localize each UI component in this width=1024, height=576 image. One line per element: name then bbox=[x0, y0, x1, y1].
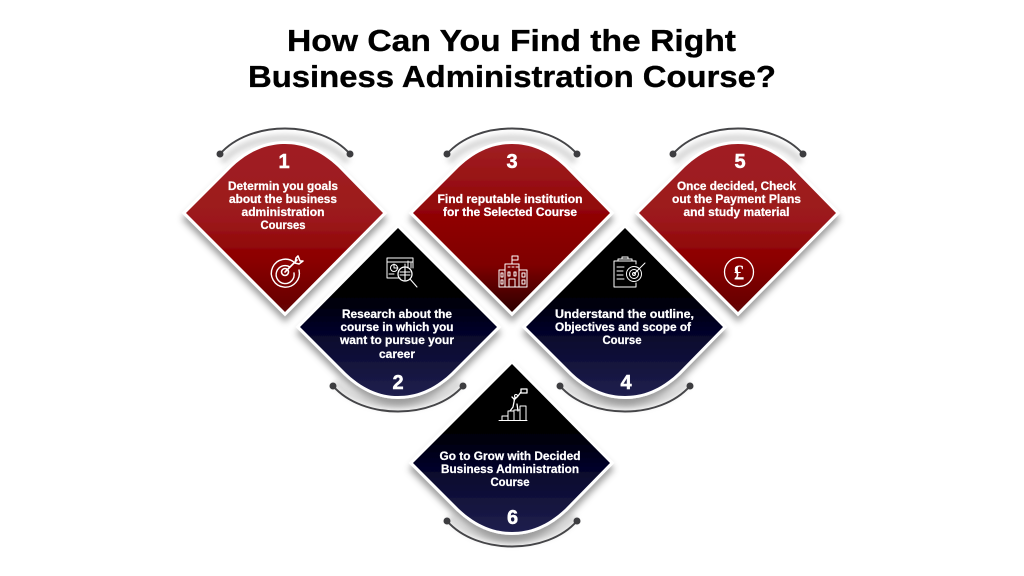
panel: step 2: 2 bbox=[392, 372, 404, 394]
panel: step 4: 4 bbox=[620, 372, 632, 394]
panel: step 1: 1 bbox=[278, 151, 290, 173]
icon: target with arrow bbox=[271, 256, 303, 287]
panel: step 2: Research about the bbox=[342, 309, 452, 321]
panel: step 3: 3 bbox=[506, 151, 518, 173]
panel: step 3: for the Selected Course bbox=[443, 207, 577, 219]
panel: step 6: Go to Grow with Decided bbox=[440, 451, 580, 463]
panel: step 5: and study material bbox=[684, 207, 790, 219]
panel: step 4 bbox=[526, 228, 723, 412]
panel: step 6: Business Administration bbox=[441, 464, 579, 476]
icon: climbing stairs with flag bbox=[499, 389, 527, 420]
panel: step 1: Determin you goals bbox=[228, 181, 338, 193]
panel: step 1 bbox=[186, 128, 383, 312]
panel: step 2: want to pursue your bbox=[339, 335, 455, 347]
panel: step 5 bbox=[639, 128, 836, 312]
icon: clipboard with target bbox=[614, 257, 645, 287]
panel: step 3 bbox=[413, 128, 610, 312]
title bbox=[248, 23, 776, 94]
panel: step 2: course in which you bbox=[340, 322, 454, 334]
panel: step 4: Understand the outline, bbox=[555, 309, 694, 321]
panel: step 4: Objectives and scope of bbox=[555, 322, 691, 334]
panel: step 6: Course bbox=[490, 477, 530, 489]
icon: chart under magnifier bbox=[387, 258, 417, 287]
title: How Can You Find the Right bbox=[287, 23, 736, 58]
icon: pound coin bbox=[724, 258, 754, 286]
panel: step 1: Courses bbox=[260, 220, 306, 232]
panel: step 2: career bbox=[379, 349, 416, 361]
panel: step 4: Course bbox=[602, 335, 642, 347]
panel: step 3: Find reputable institution bbox=[438, 194, 582, 206]
panel: step 6: 6 bbox=[507, 507, 518, 529]
panel: step 5: Once decided, Check bbox=[677, 181, 797, 193]
title: Business Administration Course? bbox=[248, 59, 776, 94]
panel: step 5: out the Payment Plans bbox=[672, 194, 801, 206]
icon: institution building bbox=[499, 256, 527, 287]
panel: step 6 bbox=[413, 364, 610, 546]
panel: step 1: administration bbox=[242, 207, 324, 219]
icon: pound coin: £ bbox=[734, 260, 744, 284]
panel: step 1: about the business bbox=[229, 194, 337, 206]
panel: step 2 bbox=[300, 228, 497, 412]
panel: step 5: 5 bbox=[734, 151, 746, 173]
